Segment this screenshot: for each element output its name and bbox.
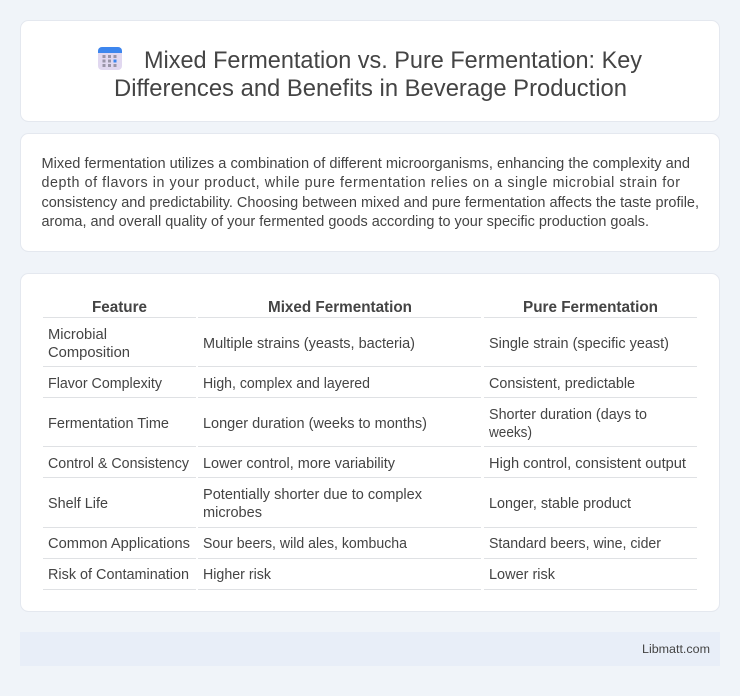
row: fermentation time xyxy=(48,407,647,441)
row: common applications: Sour beers, wild ales, kombucha xyxy=(203,536,407,552)
row: fermentation time: Shorter duration (days to xyxy=(489,407,647,423)
row: risk of contamination: Risk of Contamination xyxy=(48,567,189,583)
text block: introduction paragraph: consistency and predictability. Choosing between mixed and pure fermentation affects the taste profile, xyxy=(42,195,699,211)
row: shelf life xyxy=(48,487,631,521)
row: control and consistency: Lower control, more variability xyxy=(203,456,396,472)
row: risk of contamination xyxy=(48,567,556,583)
row: fermentation time: weeks) xyxy=(488,425,532,441)
row: microbial composition: Single strain (specific yeast) xyxy=(489,336,669,352)
row: flavor complexity xyxy=(48,376,635,392)
text block: introduction paragraph: depth of flavors in your product, while pure fermentation relies on a single microbial strain for xyxy=(42,175,680,191)
footer: Libmatt.com xyxy=(642,642,710,656)
row: fermentation time: Fermentation Time xyxy=(48,416,169,432)
panel: introduction xyxy=(20,134,720,252)
row: microbial composition: Multiple strains (yeasts, bacteria) xyxy=(203,336,415,352)
panel: comparison table xyxy=(20,274,720,612)
icon: calendar grid xyxy=(98,47,122,70)
row: microbial composition xyxy=(48,327,669,361)
table header row: Mixed Fermentation xyxy=(268,299,412,316)
table header row xyxy=(92,299,658,316)
row: flavor complexity: Flavor Complexity xyxy=(48,376,163,392)
row: microbial composition: Composition xyxy=(48,345,130,361)
row: risk of contamination: Lower risk xyxy=(489,567,556,583)
text block: introduction paragraph xyxy=(42,156,699,230)
row: common applications: Common Applications xyxy=(48,536,190,552)
row: shelf life: Potentially shorter due to complex xyxy=(203,487,422,503)
row: flavor complexity: Consistent, predictable xyxy=(489,376,635,392)
row: flavor complexity: High, complex and layered xyxy=(203,376,370,392)
row: control and consistency: High control, consistent output xyxy=(489,456,686,472)
row: microbial composition: Microbial xyxy=(48,327,107,343)
title: Mixed Fermentation vs. Pure Fermentation: Key xyxy=(144,47,642,74)
table header row: Feature xyxy=(92,299,147,316)
title xyxy=(114,47,642,102)
title: Differences and Benefits in Beverage Production xyxy=(114,75,627,102)
row: shelf life: Longer, stable product xyxy=(489,496,631,512)
row: fermentation time: Longer duration (weeks to months) xyxy=(203,416,427,432)
row: common applications xyxy=(48,536,661,552)
row: common applications: Standard beers, wine, cider xyxy=(489,536,661,552)
footer xyxy=(20,632,720,666)
row: shelf life: Shelf Life xyxy=(48,496,108,512)
panel: title card xyxy=(20,20,720,122)
text block: introduction paragraph: aroma, and overall quality of your fermented goods according to your specific production goals. xyxy=(42,214,649,230)
row: risk of contamination: Higher risk xyxy=(203,567,272,583)
row: shelf life: microbes xyxy=(203,505,262,521)
text block: introduction paragraph: Mixed fermentation utilizes a combination of different microorganisms, enhancing the complexity and xyxy=(42,156,690,172)
row: control and consistency xyxy=(48,456,686,472)
table header row: Pure Fermentation xyxy=(523,299,658,316)
row: control and consistency: Control & Consistency xyxy=(48,456,190,472)
